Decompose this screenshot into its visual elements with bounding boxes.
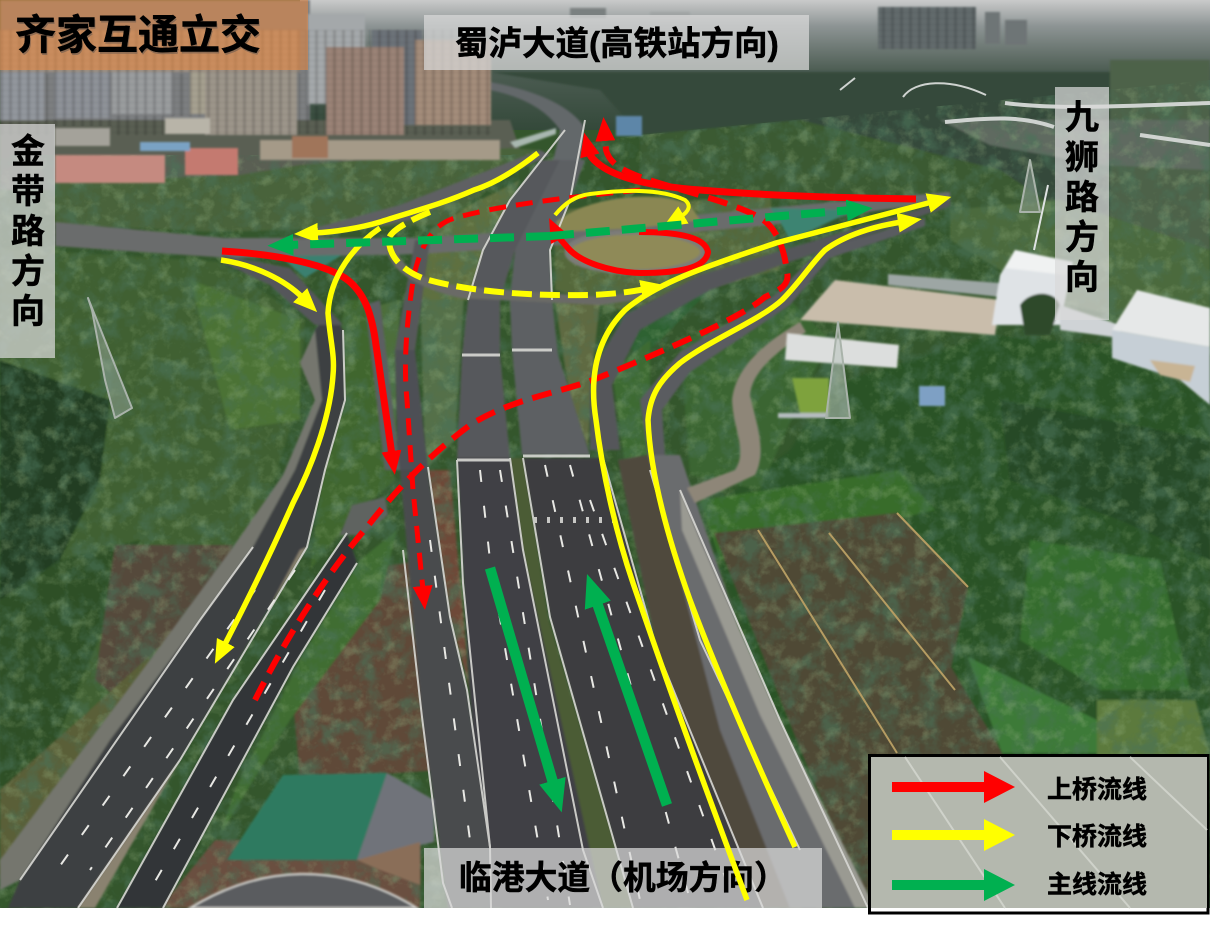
road label: 金带路方向: 路 [11, 213, 45, 251]
road markings [20, 120, 868, 908]
road label: 九狮路方向: 向 [1065, 259, 1099, 297]
road label: 九狮路方向: 路 [1065, 179, 1099, 217]
legend item: on-ramp [892, 771, 1147, 804]
arrow: 金带路 right turn [221, 260, 303, 298]
green mainline flow lines [289, 210, 851, 805]
arrow: ramp down-left [224, 228, 380, 646]
arrow: 九狮路 main ramp [594, 202, 932, 900]
right forest [700, 335, 1210, 908]
dirt road [687, 322, 806, 503]
arrow: mainline southbound [490, 568, 554, 786]
red on-ramp flow lines [222, 137, 916, 700]
arrow: 金带路 on-ramp [222, 251, 392, 455]
road label: 蜀泸大道: 蜀泸大道(高铁站方向) [455, 26, 779, 63]
road label: 金带路方向: 金 [11, 133, 45, 171]
sky and far hills [300, 0, 1210, 130]
arrow: dashed off-ramp [389, 212, 645, 295]
title: 齐家互通立交 [0, 0, 308, 70]
arrow: 九狮路 second ramp [648, 222, 902, 847]
power pylons [88, 160, 1048, 418]
arrow: long dashed on-ramp [255, 137, 788, 700]
arrow: dashed ramp south [405, 190, 640, 590]
road label: 金带路方向 [0, 124, 55, 358]
road label: 九狮路方向 [1055, 87, 1109, 320]
road label: 九狮路方向: 九 [1065, 99, 1099, 137]
tunnel portal [340, 497, 388, 535]
arrow: dashed crossing road [289, 236, 550, 245]
arrow: loop on-ramp [558, 232, 708, 273]
white strip below photo [0, 908, 1210, 937]
road label: 金带路方向: 方 [11, 253, 45, 291]
roads and embankments [0, 82, 950, 908]
arrow: 九狮路 on-ramp [589, 152, 916, 199]
road label: 蜀泸大道 [424, 15, 809, 70]
road label: 临港大道 [424, 848, 822, 908]
legend item: off-ramp [892, 819, 1147, 851]
road label: 临港大道: 临港大道（机场方向） [459, 859, 787, 896]
legend item: mainline: 主线流线 [1047, 871, 1147, 899]
arrow: loop ramp [555, 191, 689, 217]
arrow: mainline northbound [596, 600, 667, 805]
arrow: ramp to 金带路 [314, 153, 538, 233]
title: 齐家互通立交: 齐家互通立交 [16, 14, 262, 60]
title: 齐家互通立交: 齐家互通立交 [15, 12, 261, 58]
road label: 九狮路方向: 方 [1065, 219, 1099, 257]
road label: 金带路方向: 向 [11, 293, 45, 331]
green netting and grey slope [227, 773, 387, 860]
legend item: off-ramp: 下桥流线 [1047, 823, 1147, 851]
median and slope ground [360, 300, 400, 470]
legend item: mainline [892, 869, 1147, 901]
road label: 金带路方向: 带 [11, 173, 45, 211]
low-rise buildings [55, 118, 500, 183]
yellow off-ramp flow lines [221, 153, 932, 900]
bare land and buildings [0, 7, 1210, 418]
high-rise buildings [0, 7, 1027, 148]
white pipes on far hills [840, 78, 1210, 145]
legend item: on-ramp: 上桥流线 [1047, 776, 1147, 804]
legend [870, 756, 1208, 913]
left forest [0, 248, 305, 850]
road label: 九狮路方向: 狮 [1065, 139, 1099, 177]
